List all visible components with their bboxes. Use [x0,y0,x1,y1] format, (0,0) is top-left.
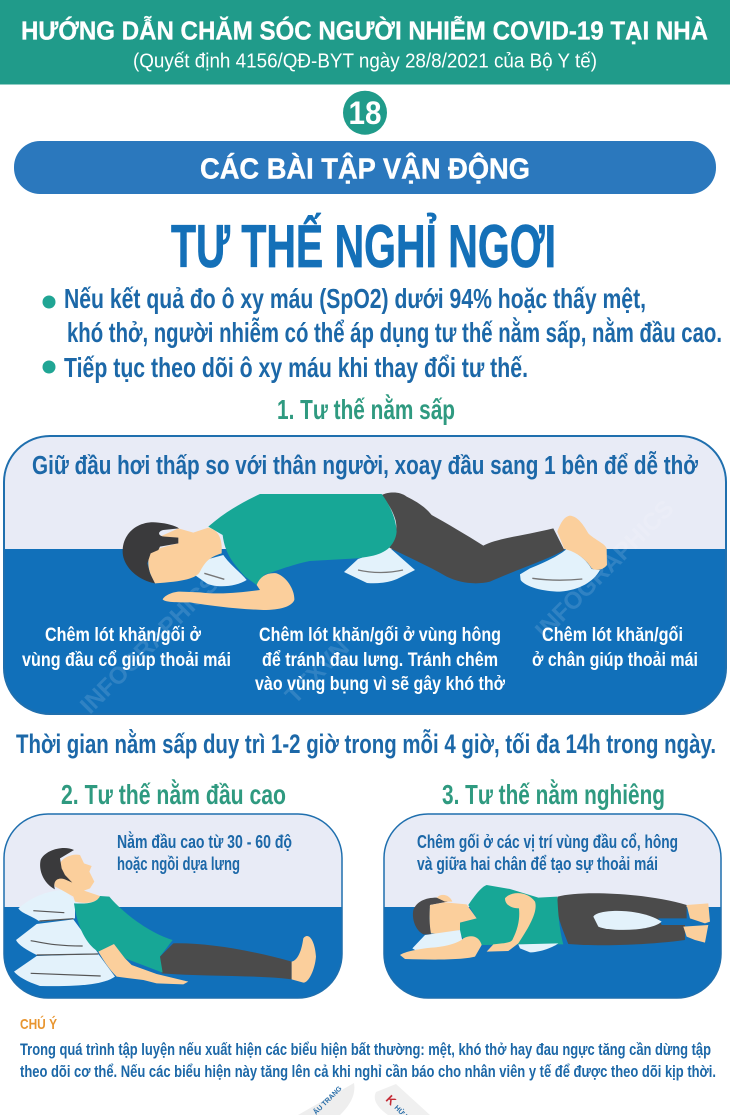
illustration: person lying prone [123,492,607,610]
label: hip support: để tránh đau lưng. Tránh chêm [262,649,498,671]
header banner [0,0,730,84]
label: hip support: Chêm lót khăn/gối ở vùng hông [259,624,501,646]
heading: position 3: 3. Tư thế nằm nghiêng [442,779,665,810]
main title: TƯ THẾ NGHỈ NGƠI [171,213,556,280]
note heading: CHÚ Ý [20,1015,57,1033]
header subtitle: (Quyết định 4156/QĐ-BYT ngày 28/8/2021 của Bộ Y tế) [133,50,597,72]
panel: prone position: INFOGRAPHICS [75,570,224,719]
number badge 18 [343,91,387,135]
footer cards [298,1083,430,1115]
panel: prone position: TTXVN [280,635,355,709]
panel text: head elevated instruction: hoặc ngồi dựa lưng [117,853,240,874]
label: leg support [532,624,698,671]
number badge 18: 18 [348,95,382,131]
panel: prone position: INFOGRAPHICS [530,495,679,644]
panel: head elevated position [4,814,342,999]
label: head and neck support [22,624,231,671]
note text [20,1041,716,1081]
heading: position 2: 2. Tư thế nằm đầu cao [61,779,286,810]
intro bullets: Tiếp tục theo dõi ô xy máu khi thay đổi tư thế. [64,352,528,383]
intro bullets [42,283,722,383]
label: leg support: Chêm lót khăn/gối [542,624,683,646]
panel text: side-lying instruction: và giữa hai chân để tạo sự thoải mái [417,853,658,874]
illustration: person lying on side [400,885,710,960]
card: disinfectant [375,1084,430,1115]
panel text: head elevated instruction [117,831,292,874]
panel: prone position [4,436,726,719]
panel text: head elevated instruction: Nằm đầu cao từ 30 - 60 độ [117,831,292,852]
label: head and neck support: Chêm lót khăn/gối ở [45,624,201,646]
label: hip support [255,624,505,695]
note section [20,1015,716,1081]
label: hip support: vào vùng bụng vì sẽ gây khó thở [255,673,505,695]
panel: side-lying position [384,814,721,999]
illustration: person with head raised [14,848,316,986]
section pill: CÁC BÀI TẬP VẬN ĐỘNG [200,152,530,186]
label: leg support: ở chân giúp thoải mái [532,649,698,671]
card: disinfectant: K [383,1092,399,1108]
section pill [14,141,716,194]
header title: HƯỚNG DẪN CHĂM SÓC NGƯỜI NHIỄM COVID-19 TẠI NHÀ [21,16,708,46]
panel text: side-lying instruction [417,831,678,874]
heading: position 1: 1. Tư thế nằm sấp [277,394,455,425]
label: head and neck support: vùng đầu cổ giúp thoải mái [22,649,231,671]
